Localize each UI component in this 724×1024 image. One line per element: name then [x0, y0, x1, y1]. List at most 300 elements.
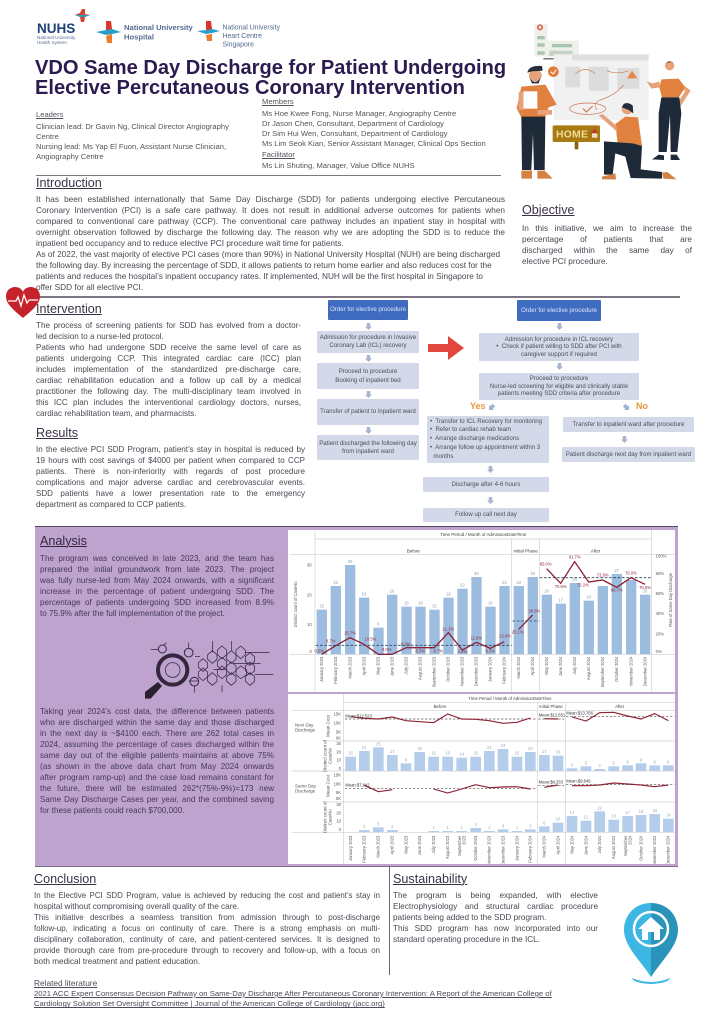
leaders block: Leaders: [36, 110, 63, 119]
chart: mean cost and cases by discharge type: 20: [336, 810, 342, 815]
bar values: 16: [418, 601, 423, 606]
flowchart: same day discharge pathway: patients meeting SDD criteria after procedure: [498, 390, 620, 397]
bar values: 19: [362, 592, 367, 597]
same day values: 13: [611, 814, 617, 819]
results text: complications and major adverse cardiac and cerebrovascular events.: [36, 478, 305, 487]
bar values: 27: [614, 568, 620, 573]
month labels: August 2024: [611, 835, 616, 859]
month labels: March 2024: [516, 656, 521, 679]
flowchart: same day discharge pathway: Yes: [470, 400, 486, 410]
month labels: July 2024: [597, 835, 602, 853]
sustainability text: standard operating procedure in the ICL.: [393, 934, 540, 944]
leaders block: Nursing lead: Ms Yap El Fuon, Assistant Nurse Clinician,: [36, 142, 226, 151]
rate labels: 70.0%: [639, 585, 651, 590]
panel: analysis: [35, 526, 678, 867]
rate labels: 26.1%: [512, 630, 524, 635]
conclusion text: In the Elective PCI SDD Program, value is achieved by reducing the cost and patient’s stay in: [34, 890, 380, 900]
related literature: 2021 ACC Expert Consensus Decision Pathway on Same-Day Discharge After Percutaneous Coronary Intervention: A Report of the American College of: [34, 989, 552, 998]
bar values: 23: [333, 580, 339, 585]
month labels: February 2023: [333, 656, 338, 684]
results text: [36, 445, 305, 509]
bar values: 26: [474, 571, 479, 576]
introduction text: overnight observation followed by discharge the following day. The reason why we are adopting the SDD is to reduce the: [36, 228, 505, 237]
analysis text: to 75.9% after the full implementation of the project.: [40, 609, 225, 618]
sustainability text: patients being added to the SDD program.: [393, 912, 546, 922]
HOME sign: HOME: [556, 129, 588, 140]
axes: 0: [309, 649, 312, 654]
next day values: 5: [613, 760, 616, 765]
introduction text: compared to conventional care pathway (CCP). The conventional care pathway includes an inpatient stay in hospital with: [36, 217, 505, 226]
chart: mean cost and cases by discharge type: 10: [336, 758, 342, 763]
rate labels: 0.0%: [315, 648, 324, 653]
chart: mean cost and cases by discharge type: 0K: [336, 735, 341, 740]
conclusion text: both medical treatment and patient education.: [34, 956, 200, 966]
next day values: 21: [362, 745, 367, 750]
axes: 0%: [656, 649, 662, 654]
rate labels: 66.7%: [611, 588, 623, 593]
heading: sustainability: Sustainability: [393, 872, 467, 886]
flowchart: conventional care pathway: Transfer of patient to inpatient ward: [320, 408, 416, 415]
icon: heart with pulse: [6, 287, 40, 318]
bar values: 15: [319, 603, 325, 608]
month labels: January 2024: [488, 656, 493, 682]
members block: Ms Lim Seok Kian, Senior Assistant Manager, Clinical Ops Section: [262, 139, 486, 148]
next day values: 23: [501, 743, 506, 748]
same day values: 1: [488, 825, 491, 830]
flowchart: conventional care pathway: from inpatient ward: [342, 448, 394, 454]
month labels: July 2023: [431, 835, 436, 853]
same day values: 17: [570, 810, 575, 815]
month labels: 2023: [461, 835, 466, 845]
bar values: 20: [544, 589, 550, 594]
axes: Distinct count of CaseNo: [293, 581, 298, 627]
same day values: 2: [391, 824, 394, 829]
month labels: August 2024: [586, 656, 591, 680]
month labels: May 2023: [376, 656, 381, 675]
members block: Ms Lin Shuting, Manager, Value Office NUHS: [262, 161, 415, 170]
month labels: July 2023: [404, 656, 409, 674]
leaders block: [36, 110, 229, 161]
month labels: November 2024: [628, 656, 633, 686]
intervention text: practitioner the following day. The multi-disciplinary team involved in: [36, 387, 301, 396]
logos: [37, 9, 280, 48]
month labels: August 2023: [418, 656, 423, 680]
mean labels: Mean:$9,646: [566, 779, 591, 784]
month labels: September 2024: [600, 656, 605, 687]
rate labels: 15.7%: [344, 630, 356, 635]
objective text: elective PCI procedure.: [522, 256, 608, 266]
chart title and phases: [434, 696, 625, 709]
next day values: 2: [599, 763, 602, 768]
chart: mean cost and cases by discharge type: 5K: [336, 729, 341, 734]
row labels and axes: Distinct count of: [323, 801, 328, 833]
rate labels: 85.0%: [540, 562, 552, 567]
month labels: 2024: [627, 835, 632, 845]
mean labels: Mean:$12,523: [345, 714, 373, 719]
axes: 10: [307, 622, 312, 627]
month labels: March 2023: [376, 835, 381, 858]
axes: [293, 553, 673, 654]
rate labels: 21.1%: [442, 626, 455, 631]
bar values: 18: [586, 595, 592, 600]
related literature: [34, 978, 552, 1008]
chart: mean cost and cases by discharge type: 20: [336, 749, 342, 754]
row labels and axes: Discharge: [295, 728, 316, 733]
mean labels: Mean:$7,842: [345, 783, 370, 788]
flowchart: conventional care pathway: Proceed to procedure: [339, 368, 397, 375]
chart title and phases: After: [591, 548, 601, 553]
bar values: 20: [390, 589, 395, 594]
rate line: [322, 562, 645, 654]
next day values: 6: [667, 759, 670, 764]
sustainability text: The program is being expanded, with elective: [393, 890, 598, 900]
chart: mean cost and cases by discharge type: 10K: [334, 721, 341, 726]
members block: Dr Sim Hui Wen, Consultant, Department of Cardiology: [262, 129, 448, 138]
heading: conclusion: Conclusion: [34, 872, 96, 886]
chart title and phases: After: [615, 704, 625, 709]
chart: mean cost and cases by discharge type: 30: [336, 741, 342, 746]
month labels: October 2024: [638, 835, 643, 861]
logo: NUHS: National University: [37, 35, 76, 40]
month labels: February 2023: [362, 835, 367, 863]
month labels: June 2024: [558, 656, 563, 676]
month labels: January 2023: [319, 656, 324, 682]
month labels: December 2024: [642, 656, 647, 686]
month labels: April 2023: [390, 835, 395, 854]
next day values: 25: [376, 741, 381, 746]
chart title and phases: Before: [407, 548, 420, 553]
logo: NUHS: [37, 9, 90, 45]
row labels and axes: Mean Cost: [325, 774, 330, 797]
same day values: 1: [461, 825, 464, 830]
analysis text: percentage of patients undergoing SDD increased from 8.9%: [40, 598, 274, 607]
rate labels: 6.7%: [434, 649, 443, 654]
title: [35, 57, 506, 99]
flowchart: conventional care pathway: Patient discharged the following day: [319, 440, 417, 447]
man with clipboard: [517, 66, 557, 179]
introduction text: Coronary Intervention (PCI) is a safe care pathway. It does not result in additional adverse outcomes for patients when: [36, 206, 505, 215]
bar values: 23: [516, 580, 522, 585]
logo: National University Heart Centre Singapore: Singapore: [222, 42, 254, 48]
same day values: 12: [584, 815, 589, 820]
results text: 19 hours with cost savings of $4000 per patient when compared to CCP: [36, 456, 305, 465]
results text: patients. There is non-inferiority with regards of post procedure: [36, 467, 305, 476]
row labels and axes: Distinct count of: [323, 739, 328, 772]
introduction text: As of 2022, the vast majority of elective PCI cases (more than 90%) in National University Hospital (NUH) are being discharged: [36, 250, 500, 259]
objective text: percentage of patients that are: [522, 234, 692, 244]
analysis text: increase in the percentage of patient undergoing SDD. The: [40, 587, 274, 596]
objective text: [522, 224, 692, 266]
chart: mean cost and cases by discharge type: 10: [336, 819, 342, 824]
logo: NUHS: Health System: [37, 40, 67, 45]
icon: home location pin: [624, 903, 678, 984]
analysis text: prepared the initial groundwork from late 2023. The project: [40, 565, 274, 574]
bar values: 23: [502, 580, 507, 585]
sustainability text: This SDD program has now incorporated into our: [393, 924, 598, 932]
next day values: 8: [405, 757, 408, 762]
same day values: 22: [597, 805, 603, 810]
same day values: 6: [543, 820, 546, 825]
flowchart: same day discharge pathway: Discharge after 4-6 hours: [452, 481, 520, 488]
same day values: 3: [502, 823, 505, 828]
members block: Members: [262, 97, 294, 106]
bar values: 26: [530, 571, 536, 576]
month labels: September: [623, 835, 628, 856]
next day values: 15: [445, 751, 451, 756]
woman pointing: [647, 61, 691, 160]
rate labels: 72.2%: [577, 583, 589, 588]
next day values: 20: [417, 746, 423, 751]
row labels and axes: Mean Cost: [325, 714, 330, 737]
next day values: 15: [515, 751, 520, 756]
bar values: 19: [446, 592, 451, 597]
month labels: April 2024: [555, 835, 560, 854]
logo: National University Heart Centre Singapore: National University: [222, 24, 280, 32]
illustration: team planning the way home: [516, 24, 691, 180]
logo: National University Hospital: [96, 21, 194, 43]
logo: National University Hospital: Hospital: [124, 32, 154, 42]
axes: 60%: [656, 591, 664, 596]
chart: mean cost and cases by discharge type: 15K: [334, 712, 341, 717]
analysis cost text: (as shown in the above data chart from May 2024 onwards: [40, 762, 274, 771]
flowchart: same day discharge pathway: Admission for procedure in ICL recovery: [505, 336, 613, 343]
analysis cost text: Taking year 2024’s cost data, the difference between patients: [40, 707, 274, 716]
month labels: February 2024: [528, 835, 533, 863]
members block: Dr Jason Chen, Consultant, Department of Cardiology: [262, 119, 444, 128]
next day values: 16: [556, 750, 561, 755]
logo: National University Heart Centre Singapore: Heart Centre: [222, 33, 262, 40]
introduction text: inpatient bed occupancy and to reduce elective PCI procedure wait time for patients.: [36, 239, 344, 248]
next day values: [348, 741, 670, 768]
kneeling man: [599, 103, 677, 179]
month labels: July 2024: [572, 656, 577, 674]
analysis cost text: 2024, assuming the percentage of cases discharged within the: [40, 740, 274, 749]
rate labels: 76.0%: [625, 571, 637, 576]
month labels: June 2024: [583, 835, 588, 855]
next day values: 21: [487, 745, 492, 750]
chart: mean cost and cases by discharge type: 0: [339, 766, 342, 771]
analysis text: [40, 554, 274, 618]
same day values: 4: [475, 822, 478, 827]
same day values: 1: [433, 825, 436, 830]
sustainability text: [393, 890, 598, 944]
intervention text: patients undergoing CCP. This integrated cardiac care (ICC) plan: [36, 354, 301, 363]
month labels: [319, 656, 647, 687]
month labels: April 2023: [361, 656, 366, 675]
analysis cost text: after program ramp-up) and the case load remains constant for: [40, 773, 274, 782]
analysis text: was fully nurse-led from May 2024 onwards, with a significant: [40, 576, 274, 585]
flowchart: conventional care pathway: Admission for procedure in Invasive: [320, 334, 416, 341]
axes: 20: [307, 592, 312, 597]
next day values: 15: [431, 751, 437, 756]
rate labels: 13.0%: [499, 634, 511, 639]
month labels: April 2024: [530, 656, 535, 675]
chart: mean cost and cases by discharge type: 0: [339, 827, 342, 832]
rate labels: 38.5%: [528, 608, 541, 613]
next day values: 6: [627, 759, 630, 764]
flowchart: same day discharge pathway: No: [636, 400, 648, 410]
flowchart: same day discharge pathway: • Transfer to ICL Recovery for monitoring: [430, 418, 542, 424]
same day values: 18: [639, 809, 644, 814]
analysis cost text: [40, 707, 274, 815]
next day values: 5: [585, 760, 588, 765]
chart title and phases: Before: [434, 704, 447, 709]
rate labels: 8.7%: [326, 638, 336, 643]
bar values: 15: [432, 603, 437, 608]
intervention text: Patients who had undergone SDD receive the same level of care as: [36, 343, 301, 352]
logo: National University Hospital: National University: [124, 23, 194, 32]
flowchart: same day discharge pathway: • Check if patient willing to SDD after PCI with: [496, 343, 622, 350]
month labels: October 2023: [446, 656, 451, 682]
flowchart: same day discharge pathway: • Arrange discharge medications: [430, 435, 519, 442]
flowchart: same day discharge pathway: • Arrange follow up appointment within 3: [430, 444, 540, 451]
month labels: June 2023: [417, 835, 422, 855]
members block: Ms Hoe Kwee Fong, Nurse Manager, Angiography Centre: [262, 109, 456, 118]
month labels: May 2023: [403, 835, 408, 854]
axes: 30: [307, 563, 312, 568]
rate labels: [315, 555, 651, 654]
analysis cost text: who are discharged within the same day and those discharged: [40, 718, 274, 727]
same day values: 19: [652, 808, 658, 813]
intervention text: led decision to a nurse-led protocol.: [36, 332, 164, 341]
row labels and axes: CaseNo: [327, 747, 332, 764]
flowchart: same day discharge pathway: Order for elective procedure: [521, 307, 597, 314]
flowchart: conventional care pathway: [317, 300, 419, 460]
icon: magnifier over hexagon network: [145, 641, 274, 699]
rate labels: 4.5%: [458, 649, 467, 654]
rate labels: 11.5%: [471, 636, 482, 641]
bar values: 9: [377, 622, 380, 627]
row labels and axes: Same Day: [295, 783, 317, 788]
HOME sign: [553, 125, 600, 149]
same day values: 17: [625, 810, 631, 815]
analysis cost text: for these patients could reach $700,000.: [40, 806, 184, 815]
chart title and phases: Time Period / Month of AdmissionDateTime: [440, 532, 527, 537]
intervention text: includes implementation of the standardized pre-discharge care,: [36, 365, 301, 374]
bars: [317, 565, 650, 654]
objective text: discharged within the same day of: [522, 246, 692, 254]
month labels: October 2024: [614, 656, 619, 682]
bar values: 17: [558, 598, 564, 603]
members block: Facilitator: [262, 150, 295, 159]
axes: Rate of Same Day Discharge: [668, 572, 673, 627]
rate labels: 6.3%: [486, 649, 495, 654]
month labels: March 2024: [542, 835, 547, 858]
introduction text: [36, 195, 505, 292]
flowchart: same day discharge pathway: [423, 300, 695, 522]
logo: NUHS: NUHS: [37, 21, 75, 36]
arrow: red transition arrow: [428, 336, 464, 360]
row labels and axes: [295, 714, 332, 833]
month labels: May 2024: [569, 835, 574, 854]
sustainability text: Electrophysiology and structural cardiac procedure: [393, 902, 598, 910]
bar values: 30: [348, 559, 353, 564]
mean cost lines: [345, 717, 674, 789]
same day values: 3: [529, 823, 532, 828]
intervention text: cardiac rehabilitation team, and pharmacists.: [36, 409, 197, 418]
flowchart: same day discharge pathway: Proceed to procedure: [530, 375, 588, 382]
flowchart: conventional care pathway: Coronary Lab (ICL) recovery: [329, 342, 407, 349]
next day values: 15: [473, 751, 479, 756]
same day bars: [359, 811, 674, 832]
rate labels: 10.5%: [364, 637, 377, 642]
related literature: Cardiology Solution Set Oversight Committee | Journal of the American College of Cardiology (jacc.org): [34, 999, 385, 1008]
conclusion text: hospital without compromising overall quality of the care.: [34, 902, 239, 910]
leaders block: Centre: [36, 132, 59, 141]
logo: National University Heart Centre Singapore: [197, 21, 280, 48]
next day values: 6: [654, 759, 657, 764]
axes: 100%: [656, 553, 667, 558]
next day values: 8: [640, 757, 643, 762]
heading: results: Results: [36, 426, 78, 440]
mean labels: Mean:$13,766: [566, 711, 594, 716]
chart: mean cost and cases by discharge type: [288, 694, 675, 864]
month labels: September: [457, 835, 462, 856]
intervention text: this ICC plan includes the interventional cardiology doctors, nurses,: [36, 398, 301, 407]
chart: mean cost and cases by discharge type: 30: [336, 802, 342, 807]
flowchart: same day discharge pathway: Follow up call next day: [455, 511, 517, 518]
conclusion text: provide thorough care from pre-procedure through to recovery and follow-up, with a focus on: [34, 946, 380, 954]
rate labels: 6.3%: [416, 649, 425, 654]
introduction text: It has been established internationally that Same Day Discharge (SDD) for patients undergoing elective Percutaneous: [36, 195, 505, 204]
bar values: [319, 559, 648, 627]
rate labels: 91.7%: [569, 555, 581, 560]
flowchart: same day discharge pathway: Patient discharge next day from inpatient ward: [566, 451, 691, 458]
next day values: 17: [542, 749, 547, 754]
row labels and axes: CaseNo: [327, 809, 332, 825]
results text: SDD patients have a lower presentation rate to the emergency: [36, 489, 305, 498]
month labels: February 2024: [502, 656, 507, 684]
row labels and axes: Next Day: [295, 723, 314, 728]
axes: 80%: [656, 571, 664, 576]
chart title and phases: Initial Phase: [539, 704, 563, 709]
next day values: 14: [459, 752, 465, 757]
hospital building: [535, 24, 579, 59]
members block: [262, 97, 486, 170]
conclusion text: follow-up, indicating a focus on continuity of care. There is a strong emphasis on multi-: [34, 924, 380, 932]
rate labels: 70.6%: [555, 584, 567, 589]
results text: department as compared to CCP patients.: [36, 500, 186, 509]
bar values: 22: [460, 583, 465, 588]
chart: mean cost and cases by discharge type: 10K: [334, 781, 341, 786]
same day values: 10: [556, 817, 561, 822]
intervention text: The process of screening patients for SDD has evolved from a doctor-: [36, 321, 301, 330]
results text: In the elective PCI SDD Program, patient’s stay in hospital is reduced by: [36, 445, 305, 454]
chart title and phases: Time Period / Month of AdmissionDateTime: [468, 696, 552, 701]
conclusion text: disciplinary collaboration, continuity of care, and patient-centered services. It is designed to: [34, 934, 380, 944]
same day values: 5: [377, 821, 380, 826]
chart: mean cost and cases by discharge type: 0K: [336, 796, 341, 801]
bar values: 16: [404, 601, 409, 606]
same day values: 1: [516, 825, 519, 830]
same day values: 14: [666, 813, 671, 818]
heading: introduction: Introduction: [36, 176, 102, 190]
objective text: In this initiative, we aim to increase the: [522, 224, 692, 232]
flowchart: same day discharge pathway: Nurse-led screening for eligible and clinically stable: [490, 383, 628, 390]
heading: objective: Objective: [522, 203, 574, 217]
introduction text: offer SDD for all elective PCI.: [36, 283, 143, 292]
next day values: 3: [571, 762, 574, 767]
month labels: December 2023: [474, 656, 479, 686]
leaders block: Clinician lead: Dr Gavin Ng, Clinical Director Angiography: [36, 122, 229, 131]
chart: monthly cases and rate of same day discharge: [288, 530, 675, 692]
analysis cost text: the future, there will be estimated 262*(75%-9%)=173 new: [40, 784, 274, 793]
next day bars: [345, 747, 674, 771]
chart title and phases: Initial Phase: [513, 548, 538, 553]
rate labels: 6.3%: [401, 641, 411, 646]
month labels: [348, 835, 671, 865]
month labels: September 2023: [432, 656, 437, 687]
